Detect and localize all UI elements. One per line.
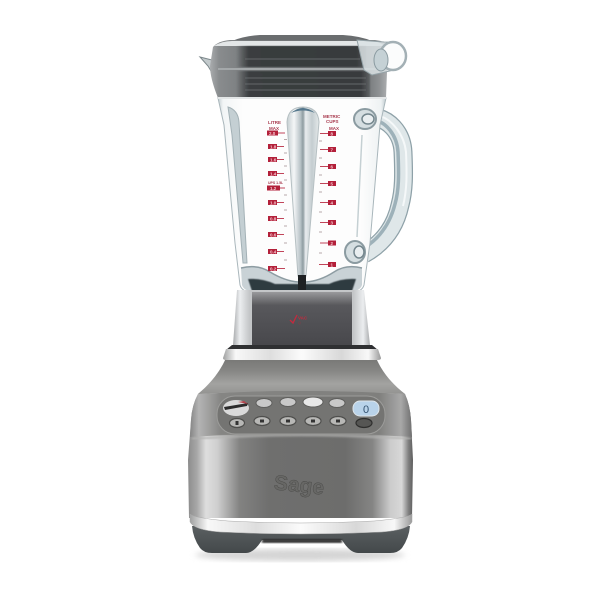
litre scale: 0.8 [270, 216, 277, 222]
lid cap top [232, 35, 372, 41]
red tick logo: VAC [298, 316, 308, 320]
cups scale: 1 [330, 262, 334, 268]
lcd display [353, 401, 379, 416]
cups scale: 7 [330, 148, 334, 152]
control plate [190, 391, 412, 437]
lid spout [200, 57, 214, 76]
dark window [252, 292, 352, 345]
cups scale: 8 [330, 132, 334, 136]
button glyphs [236, 420, 340, 425]
right glass edge [357, 135, 362, 237]
jug handle [364, 116, 407, 254]
litre scale: LITRE [268, 120, 281, 125]
jug floor [241, 267, 362, 291]
cups scale: 2 [330, 241, 334, 246]
cups scale: 6 [330, 164, 334, 170]
cups scale: 3 [330, 220, 334, 226]
lid pull tab [357, 40, 406, 75]
dark inner plug [236, 46, 366, 67]
red tick logo: Q [298, 321, 301, 325]
litre scale: 1.4 [270, 172, 277, 176]
cups scale: CUPS [326, 119, 339, 124]
base neck [233, 290, 370, 345]
handle joints [345, 109, 376, 263]
lcd display: 0 [363, 404, 369, 416]
collar [223, 345, 381, 360]
blade hub [298, 275, 306, 290]
litre scale: 1.6 [270, 158, 277, 162]
left glass rib [228, 107, 247, 263]
dial [223, 400, 249, 416]
cups scale: 4 [330, 200, 334, 206]
blender base body [188, 358, 413, 518]
glass jug [218, 98, 386, 292]
front top edge [192, 435, 411, 439]
cups scale: MAX [329, 126, 339, 131]
litre scale: 1.0 [270, 200, 277, 206]
cups scale: METRIC [323, 114, 341, 119]
chrome strip [190, 514, 412, 534]
red tick logo [290, 315, 308, 325]
base shadow [195, 549, 405, 561]
litre scale: 0.6 [270, 232, 277, 238]
central column [287, 107, 319, 276]
shoulder [198, 358, 405, 394]
litre scale: 0.4 [270, 250, 277, 254]
bottom buttons [230, 416, 372, 428]
scale ticks [284, 140, 322, 260]
litre scale: 1.2 [270, 186, 277, 191]
litre scale: 1.8 [270, 144, 277, 150]
litre scale [267, 120, 285, 272]
litre scale: UPS 1.5L [268, 181, 284, 185]
top buttons [256, 397, 345, 408]
control panel [217, 396, 385, 434]
cups scale: 5 [330, 182, 334, 186]
litre scale: 2.0 [269, 131, 276, 136]
brand logo: Sage [273, 471, 325, 500]
litre scale: 0.2 [270, 266, 277, 272]
litre scale: MAX [269, 126, 279, 131]
base feet [192, 526, 410, 553]
cups scale [319, 114, 341, 268]
lid [200, 35, 406, 98]
